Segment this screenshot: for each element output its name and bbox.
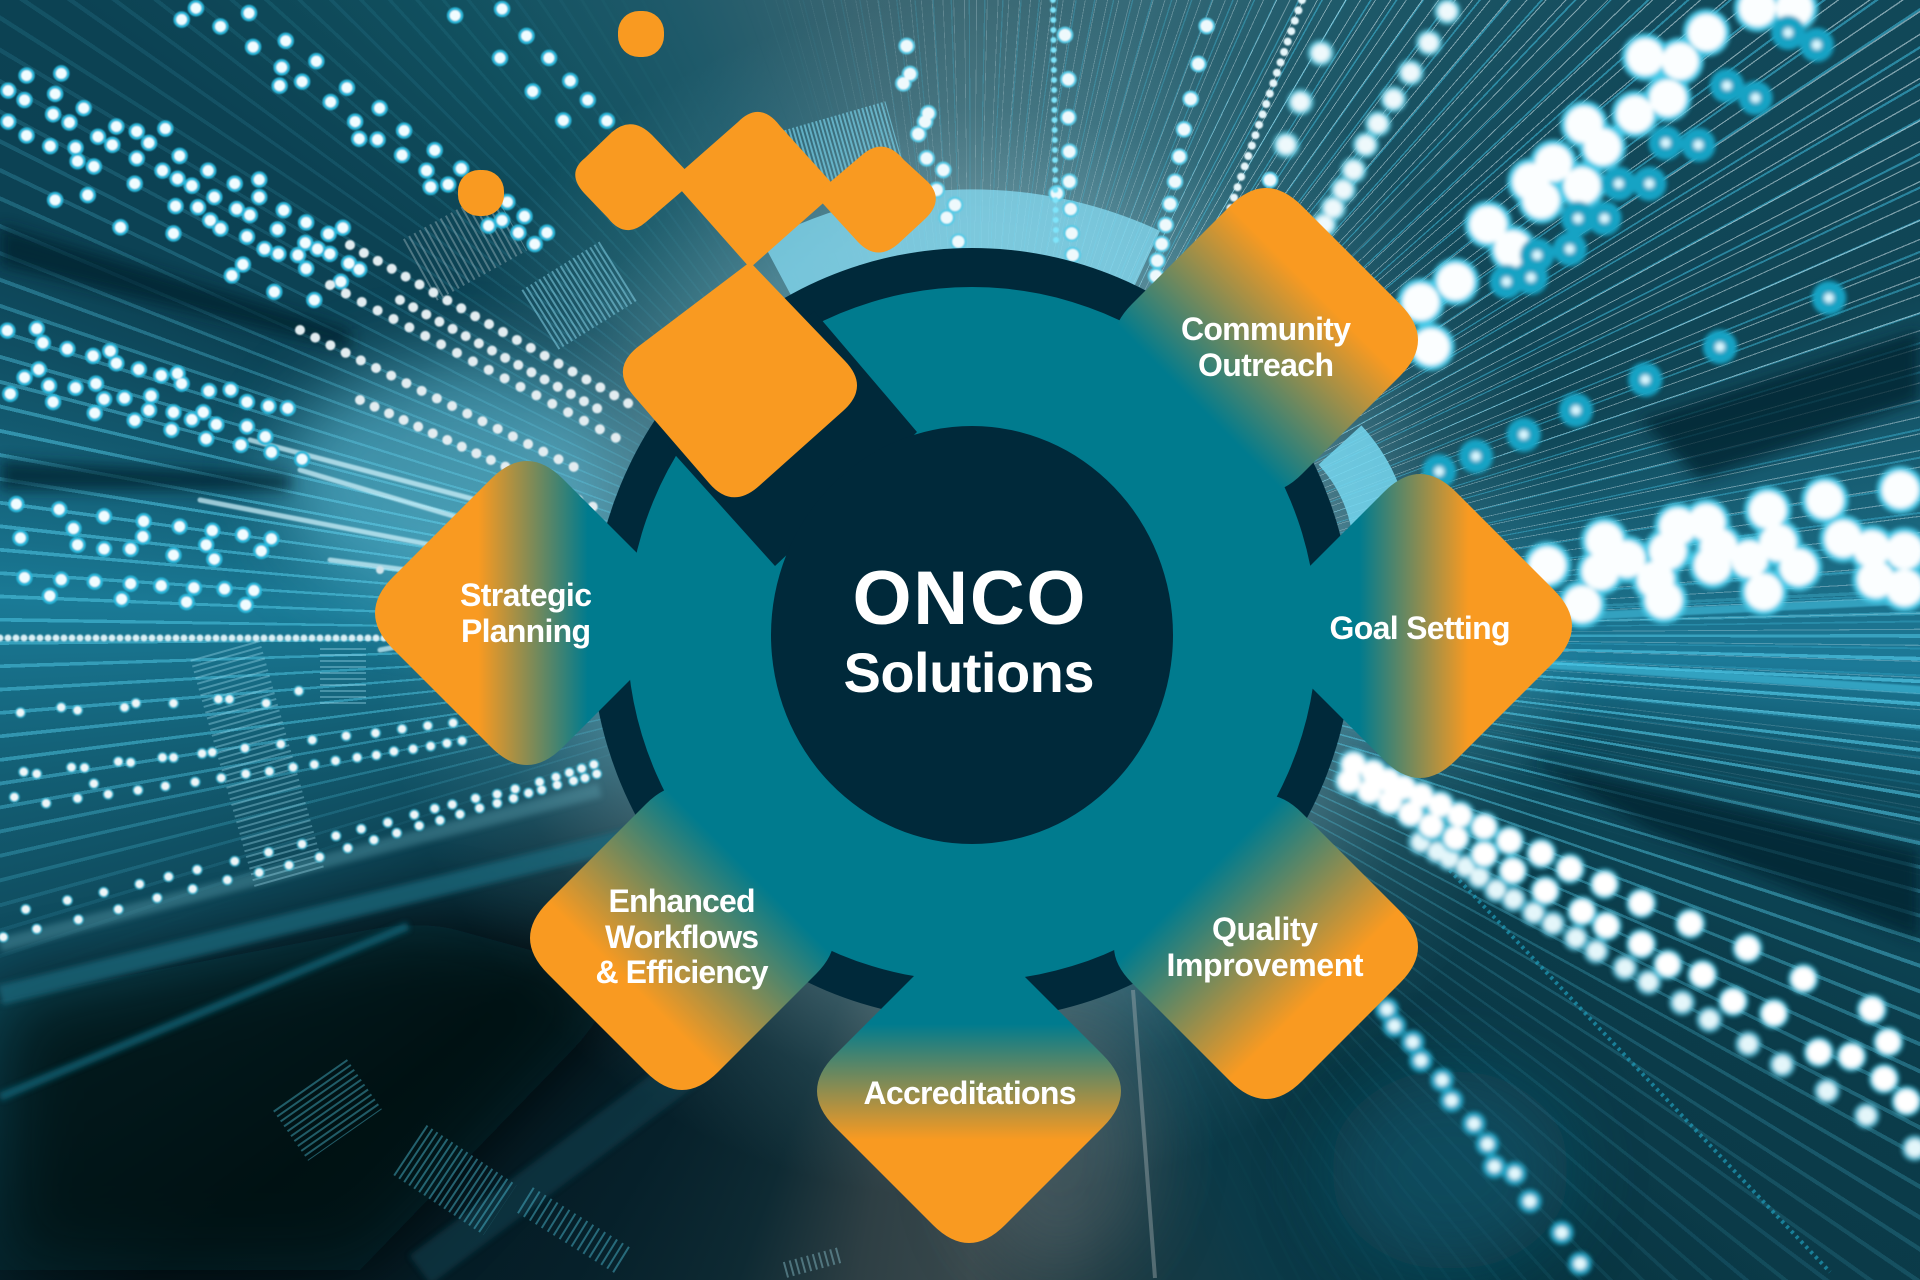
background: ghost arcs and hatch panels [225, 135, 1380, 1270]
segment: Strategic Planning [375, 461, 679, 765]
segment: Enhanced Workflows & Efficiency: Workflows [605, 919, 759, 955]
dark notch behind orange diamond [668, 311, 917, 566]
segment: Accreditations: Accreditations [864, 1075, 1076, 1111]
logo: right small diamond [815, 147, 936, 253]
background: dotted light rows, left and top [0, 0, 1392, 937]
wheel teal band [627, 287, 1317, 981]
segment: Enhanced Workflows & Efficiency: Enhanced [608, 883, 756, 919]
segment: Community Outreach: Community [1181, 311, 1351, 347]
dense white dots beside the wheel [0, 245, 640, 638]
logo: left dot [458, 170, 504, 216]
segment: Enhanced Workflows & Efficiency [530, 786, 834, 1090]
segment: Community Outreach [1114, 188, 1418, 492]
hub title: ONCO [852, 556, 1086, 641]
logo: top dot [618, 11, 664, 57]
orange logo mark [458, 11, 936, 497]
segment: Quality Improvement: Quality [1212, 911, 1318, 947]
diagram: ONCO Solutions wheel [375, 188, 1572, 1243]
logo: centre diamond [672, 112, 838, 268]
segment: Strategic Planning: Planning [461, 613, 591, 649]
centre hub [771, 426, 1173, 844]
segment: Strategic Planning: Strategic [460, 577, 592, 613]
segment: Community Outreach: Outreach [1198, 347, 1334, 383]
lower-left dots [3, 691, 597, 937]
hub title: Solutions [844, 641, 1094, 704]
background: dark bands [0, 225, 1920, 940]
upper-left and left dots [7, 8, 607, 605]
background: bright streaks [200, 440, 1920, 690]
segment: Accreditations [817, 939, 1121, 1243]
lower-right dots [1349, 764, 1915, 1264]
wheel outer dark ring [591, 248, 1353, 1020]
top centre dots [903, 26, 1392, 276]
background tonal regions [0, 360, 1570, 1270]
upper-right dots [1286, 8, 1905, 604]
segment: Quality Improvement [1114, 795, 1418, 1099]
segment: Enhanced Workflows & Efficiency: & Efficiency [596, 954, 769, 990]
fine dotted columns [1053, 0, 1056, 240]
segment: Goal Setting [1268, 474, 1572, 778]
segment: Quality Improvement: Improvement [1166, 947, 1364, 983]
background: vertical road lines [1133, 860, 1830, 1278]
segment: Goal Setting: Goal Setting [1330, 610, 1510, 646]
logo: left small diamond [575, 124, 695, 230]
background: blurred dots, right side [1286, 8, 1915, 1264]
logo: large lower diamond [623, 262, 857, 497]
background: fine white streaks [798, 0, 1920, 858]
background: teal bands lower left [0, 790, 700, 1270]
hub title [844, 556, 1094, 704]
